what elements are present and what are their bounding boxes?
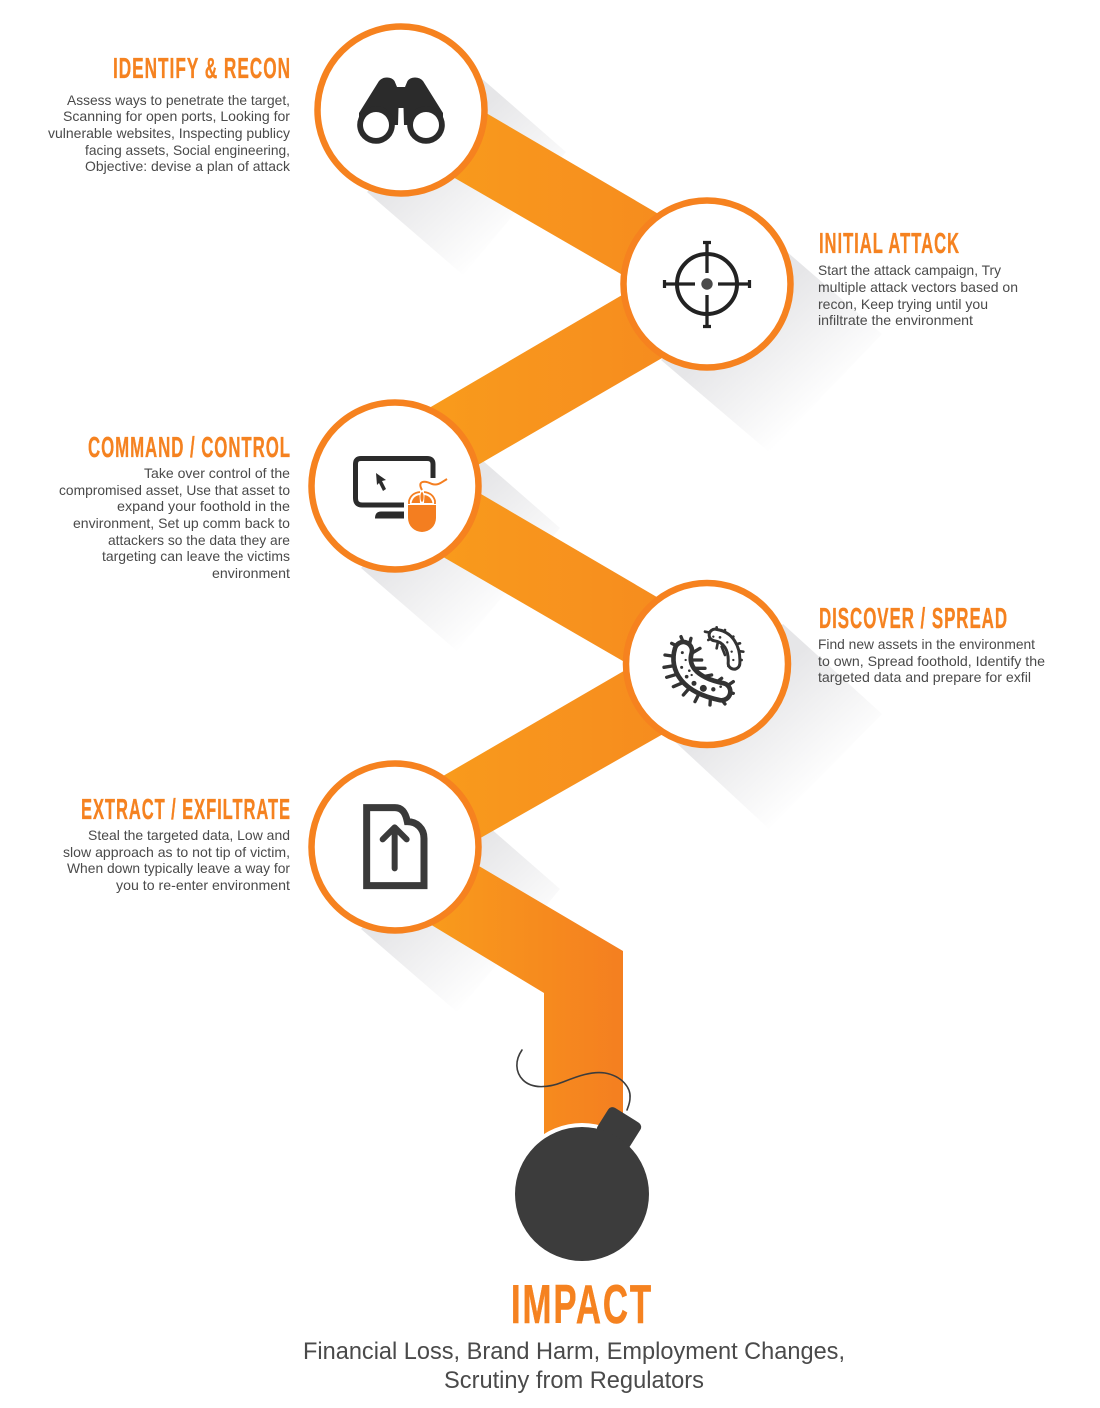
text: command and control description: environment <box>212 565 290 581</box>
text: identify and recon description: Assess ways to penetrate the target, <box>67 92 290 108</box>
band: discover to extract <box>400 662 700 861</box>
text: discover and spread description: targeted data and prepare for exfil <box>818 669 1031 685</box>
heading: command and control: COMMAND / CONTROL <box>88 432 291 464</box>
text: initial attack description: Start the attack campaign, Try <box>818 262 1001 278</box>
text: identify and recon description: vulnerable websites, Inspecting publicy <box>48 125 290 141</box>
circle: extract and exfiltrate <box>312 764 478 930</box>
text: initial attack description: recon, Keep trying until you <box>818 296 988 312</box>
text: impact description: Scrutiny from Regulators <box>444 1367 704 1394</box>
text: discover and spread description: Find new assets in the environment <box>818 636 1035 652</box>
circle: command and control <box>312 402 478 570</box>
text: extract and exfiltrate description: you to re-enter environment <box>116 877 290 893</box>
text: command and control description: compromised asset, Use that asset to <box>59 482 290 498</box>
icon: monitor and mouse <box>356 458 447 532</box>
icon: binoculars <box>357 78 445 144</box>
panel: impact <box>303 1273 845 1394</box>
text: impact description <box>303 1338 845 1394</box>
panel: initial attack <box>818 228 1018 328</box>
text: initial attack description: infiltrate the environment <box>818 312 973 328</box>
text: discover and spread description <box>818 636 1045 685</box>
band: extract down to bomb <box>400 843 623 1135</box>
circle: identify and recon <box>318 26 484 194</box>
text: command and control description: attackers so the data they are <box>108 532 290 548</box>
icon: bacteria <box>664 627 743 705</box>
band: initial attack to command <box>400 284 700 487</box>
text: command and control description: Take over control of the <box>144 465 290 481</box>
text: command and control description: targeting can leave the victims <box>102 548 290 564</box>
long shadows behind circles <box>361 77 882 1012</box>
circle: discover and spread <box>626 583 788 745</box>
text: identify and recon description: Objective: devise a plan of attack <box>85 158 291 174</box>
band: recon to initial attack <box>420 86 720 320</box>
heading: impact: IMPACT <box>511 1273 653 1335</box>
text: extract and exfiltrate description: When down typically leave a way for <box>67 860 290 876</box>
circle: initial attack <box>624 200 790 368</box>
band: command to discover <box>400 470 720 690</box>
bomb <box>511 1050 653 1265</box>
text: identify and recon description: Scanning for open ports, Looking for <box>63 108 290 124</box>
heading: initial attack: INITIAL ATTACK <box>819 228 960 260</box>
text: initial attack description <box>818 262 1018 328</box>
icon: document upload <box>367 808 424 886</box>
text: discover and spread description: to own, Spread foothold, Identify the <box>818 653 1045 669</box>
text: initial attack description: multiple attack vectors based on <box>818 279 1018 295</box>
text: command and control description <box>59 465 290 581</box>
text: extract and exfiltrate description: Steal the targeted data, Low and <box>88 827 290 843</box>
panel: command and control <box>59 432 291 581</box>
icon: crosshair <box>663 242 750 327</box>
text: extract and exfiltrate description <box>63 827 290 893</box>
text: command and control description: expand your foothold in the <box>117 498 290 514</box>
heading: identify and recon: IDENTIFY & RECON <box>113 53 291 85</box>
text: extract and exfiltrate description: slow approach as to not tip of victim, <box>63 844 290 860</box>
text: impact description: Financial Loss, Brand Harm, Employment Changes, <box>303 1338 845 1365</box>
panel: identify and recon <box>48 53 291 174</box>
text: identify and recon description: facing assets, Social engineering, <box>85 142 290 158</box>
text: command and control description: environment, Set up comm back to <box>73 515 290 531</box>
heading: extract and exfiltrate: EXTRACT / EXFILTRATE <box>81 794 291 826</box>
panel: discover and spread <box>818 603 1045 685</box>
panel: extract and exfiltrate <box>63 794 291 893</box>
text: identify and recon description <box>48 92 291 174</box>
